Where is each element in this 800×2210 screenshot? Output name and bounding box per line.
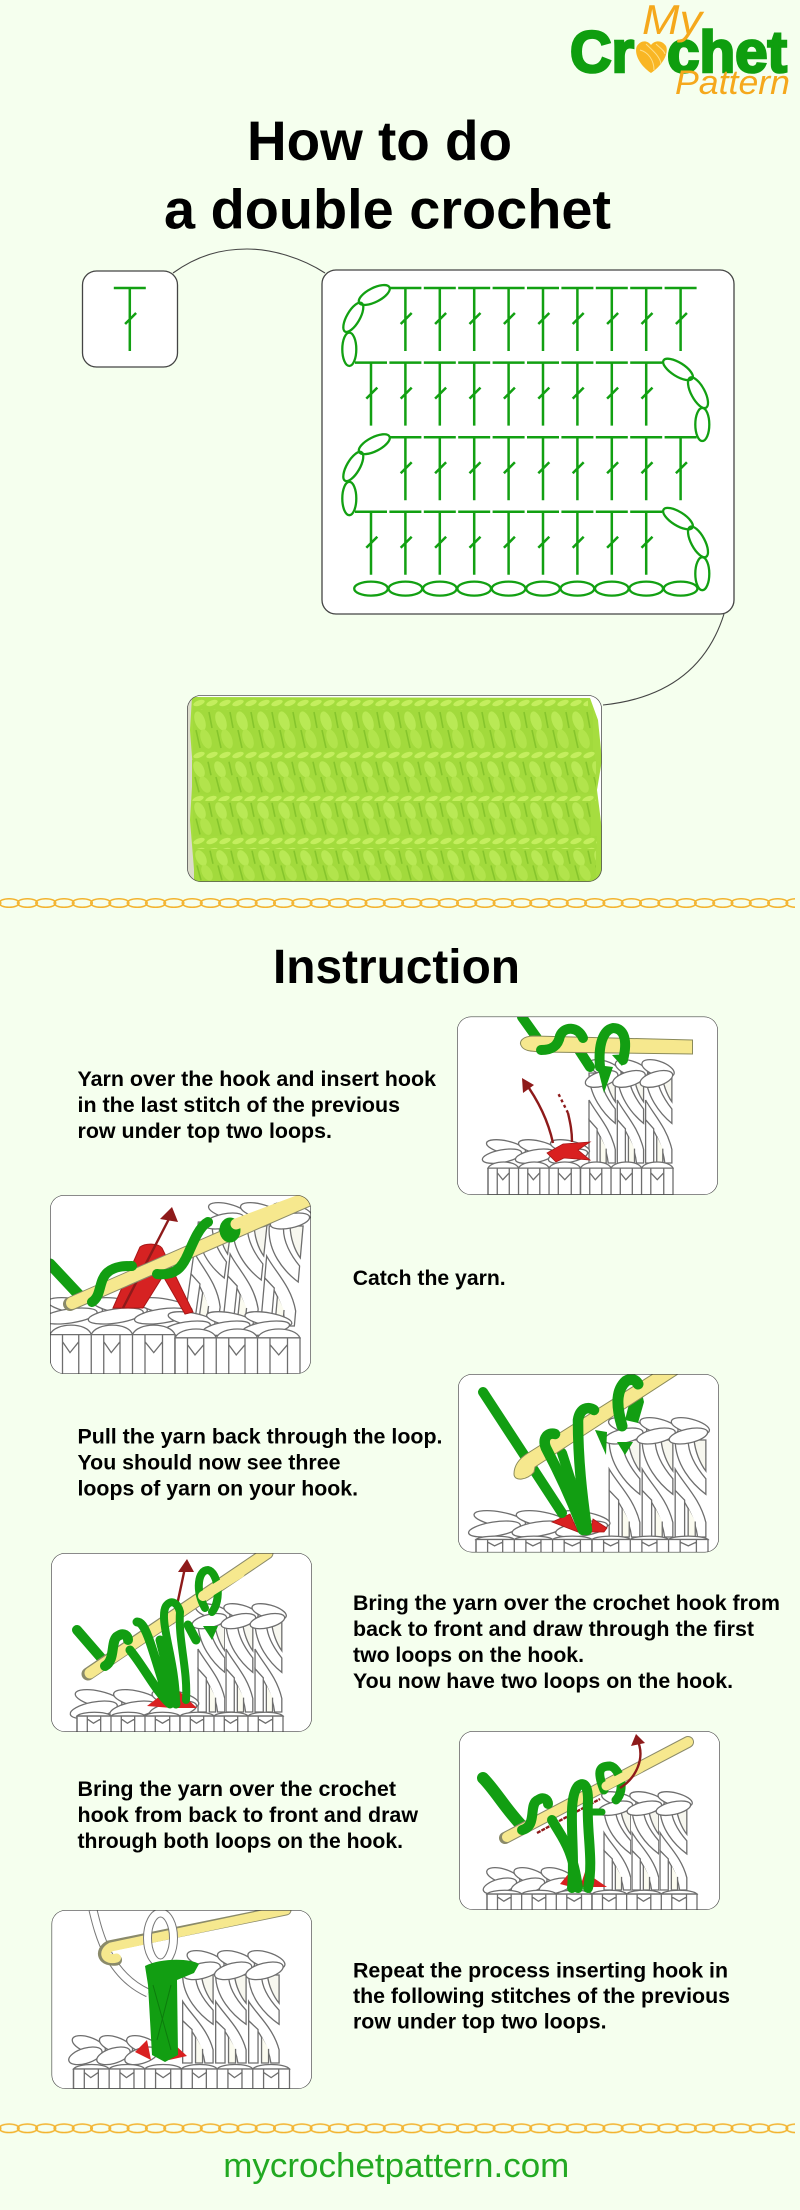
step 3 text: You should now see three	[78, 1450, 341, 1474]
connector: chart to swatch	[603, 614, 724, 705]
heading: instruction: Instruction	[273, 941, 520, 994]
step 1 text: in the last stitch of the previous	[78, 1093, 400, 1117]
step 4 text: back to front and draw through the first	[353, 1617, 754, 1641]
step 4 illustration	[51, 1553, 312, 1733]
step 1 text: Yarn over the hook and insert hook	[78, 1067, 436, 1091]
step 4 text: two loops on the hook.	[353, 1643, 584, 1667]
title: How to do	[247, 109, 512, 172]
foundation chain	[354, 582, 697, 596]
step 2 illustration	[40, 1195, 313, 1377]
title: a double crochet	[164, 178, 611, 240]
step 2 text: Catch the yarn.	[353, 1266, 506, 1290]
logo: Pattern	[675, 64, 790, 102]
step 3 text	[78, 1424, 442, 1500]
step 3 text: Pull the yarn back through the loop.	[78, 1424, 442, 1448]
step 5 text: hook from back to front and draw	[78, 1803, 418, 1827]
step 3 illustration	[458, 1374, 719, 1554]
step 3 text: loops of yarn on your hook.	[78, 1476, 358, 1500]
step 6 text: the following stitches of the previous	[353, 1984, 730, 2008]
step 5 text: Bring the yarn over the crochet	[78, 1777, 396, 1801]
step 6 text	[353, 1958, 730, 2034]
step 5 text	[78, 1777, 418, 1853]
step 5 text: through both loops on the hook.	[78, 1829, 403, 1853]
footer website: mycrochetpattern.com	[223, 2147, 569, 2185]
step 6 text: Repeat the process inserting hook in	[353, 1958, 728, 1982]
step 4 text: Bring the yarn over the crochet hook from	[353, 1591, 780, 1615]
step 4 text	[353, 1591, 780, 1693]
divider bottom	[0, 2122, 795, 2134]
logo: Cr	[570, 20, 634, 85]
panel: double crochet chart	[322, 270, 734, 614]
row 3 stitches	[339, 430, 697, 515]
step 5 illustration	[459, 1731, 720, 1911]
row 1 stitches	[339, 281, 697, 366]
divider top	[0, 897, 795, 909]
row 4 stitches	[355, 504, 712, 590]
step 6 illustration	[52, 1910, 312, 2089]
step 1 text	[78, 1067, 436, 1143]
panel: crochet swatch photo	[187, 695, 602, 882]
step 6 text: row under top two loops.	[353, 2010, 606, 2034]
title	[164, 109, 611, 240]
logo: chet	[667, 20, 787, 85]
logo	[570, 0, 790, 102]
step 1 text: row under top two loops.	[78, 1119, 332, 1143]
row 2 stitches	[355, 355, 712, 441]
step 1 illustration	[457, 1016, 718, 1195]
step 4 text: You now have two loops on the hook.	[353, 1669, 733, 1693]
connector: symbol to chart	[173, 249, 325, 273]
panel: single double crochet symbol	[82, 271, 178, 367]
